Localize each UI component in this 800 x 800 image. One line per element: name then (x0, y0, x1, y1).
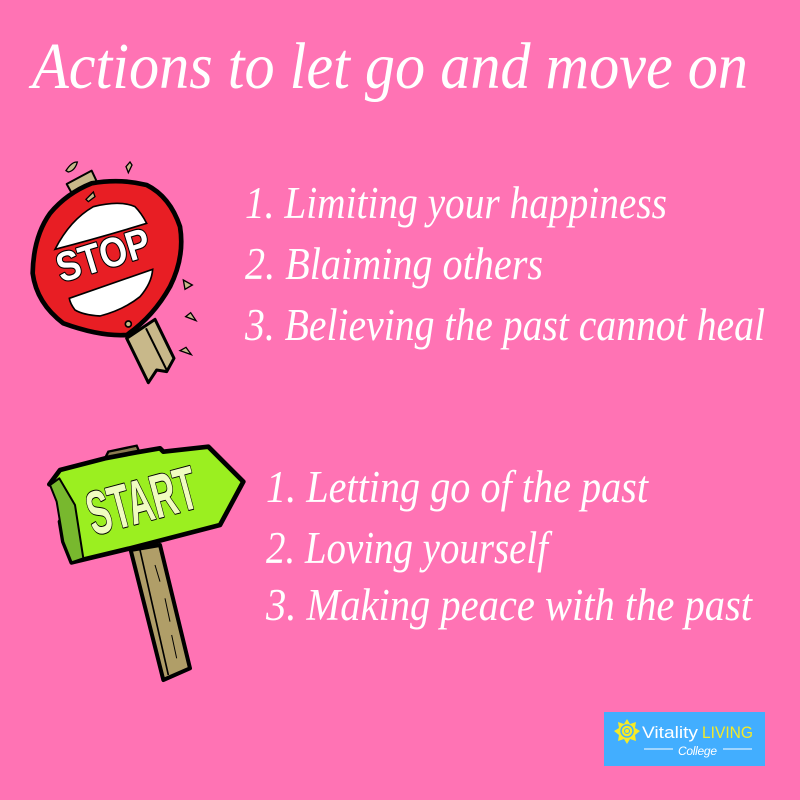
logo: Vitality Living College: College (678, 744, 718, 758)
icon: stop sign (33, 162, 196, 383)
logo: Vitality Living College (604, 712, 765, 766)
list: start items: 3. Making peace with the past (265, 580, 753, 630)
list: start items (265, 462, 753, 630)
icon: stop sign: STOP (51, 219, 156, 291)
list: start items: 1. Letting go of the past (266, 462, 649, 512)
icon: start sign: START (79, 454, 205, 549)
list: start items: 2. Loving yourself (266, 523, 553, 573)
list: stop items: 2. Blaiming others (245, 239, 543, 289)
icon: start sign (49, 446, 243, 680)
title: Actions to let go and move on (28, 30, 748, 103)
logo: Vitality Living College: Vitality (642, 723, 699, 742)
icon: sun (614, 719, 640, 744)
list: stop items (244, 178, 765, 350)
logo: Vitality Living College: LIVING (702, 723, 753, 742)
list: stop items: 1. Limiting your happiness (245, 178, 667, 228)
